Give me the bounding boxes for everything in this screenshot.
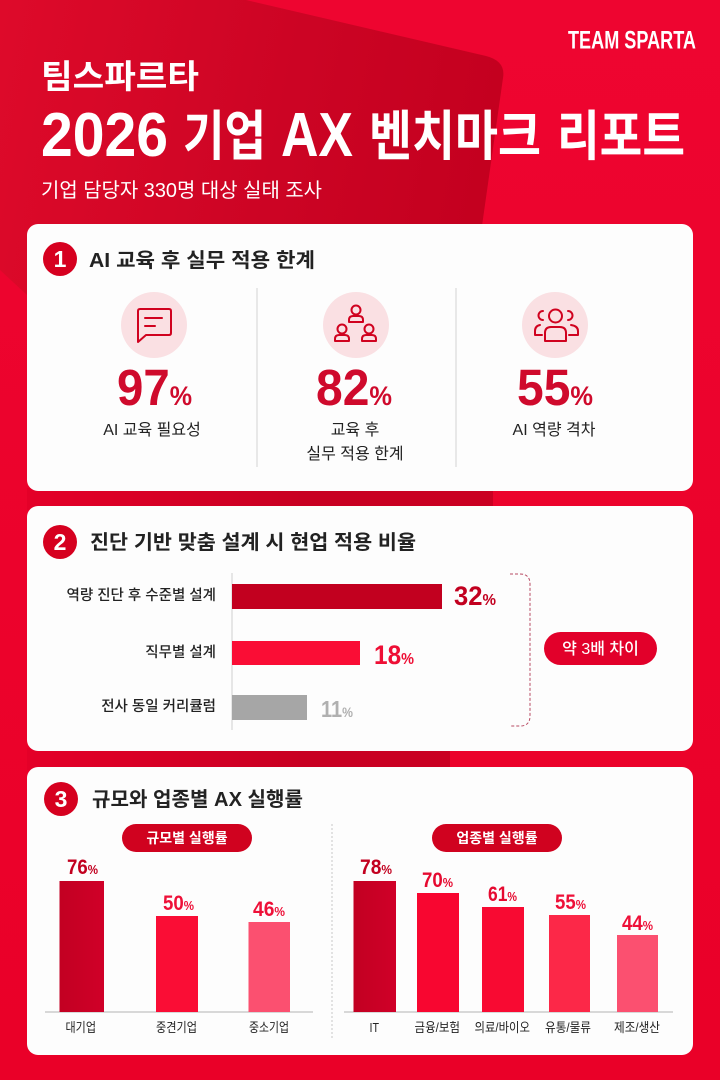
bar 중소기업 bbox=[248, 898, 290, 1035]
bar IT: IT bbox=[370, 1020, 379, 1035]
row 32%: 32% bbox=[454, 581, 496, 611]
bar 대기업: 대기업 bbox=[66, 1020, 96, 1035]
pill: 규모별 실행률 bbox=[122, 824, 252, 852]
main title: 리포트 bbox=[557, 107, 685, 167]
bar 대기업 bbox=[60, 856, 104, 1035]
row 11%: 11% bbox=[321, 696, 353, 722]
icon: speech bubble bbox=[121, 292, 187, 358]
icon: group bbox=[522, 292, 588, 358]
pill: 규모별 실행률: 규모별 실행률 bbox=[146, 830, 228, 846]
pill: 업종별 실행률: 업종별 실행률 bbox=[456, 830, 538, 846]
panel 1: AI 교육 후 실무 적용 한계 bbox=[27, 224, 693, 491]
row 11% bbox=[101, 695, 353, 722]
main title: 벤치마크 bbox=[369, 107, 541, 167]
label: AI 역량 격차 bbox=[513, 421, 596, 439]
bar 제조/생산 bbox=[614, 912, 660, 1035]
bar 중견기업 bbox=[156, 892, 198, 1035]
stat: 82%: 실무 적용 한계 bbox=[306, 445, 404, 463]
value 55%: 55% bbox=[517, 359, 593, 416]
number badge 2: 2 bbox=[54, 529, 66, 555]
company name: 팀스파르타 bbox=[41, 58, 199, 95]
panel 2: 진단 기반 맞춤 설계 bbox=[27, 506, 693, 751]
row 11%: 전사 동일 커리큘럼 bbox=[101, 698, 216, 715]
bracket bbox=[510, 574, 530, 726]
bar 제조/생산: 제조/생산 bbox=[614, 1020, 660, 1035]
row 18% bbox=[145, 640, 414, 670]
row 32% bbox=[66, 581, 496, 611]
number badge 2 bbox=[43, 525, 77, 559]
callout: 약 3배 차이 bbox=[544, 632, 657, 665]
bar 의료/바이오 bbox=[474, 883, 530, 1035]
value 97%: 97% bbox=[117, 359, 192, 416]
bar 중소기업: 중소기업 bbox=[249, 1020, 289, 1035]
row 18%: 18% bbox=[374, 640, 414, 670]
chart: by industry bbox=[344, 824, 673, 1035]
row 32%: 역량 진단 후 수준별 설계 bbox=[66, 587, 216, 604]
row 18%: 직무별 설계 bbox=[145, 644, 216, 661]
bar 대기업: 76% bbox=[67, 856, 98, 879]
main title: 2026 bbox=[41, 101, 168, 170]
bar 중견기업: 50% bbox=[163, 892, 194, 915]
bar 제조/생산: 44% bbox=[622, 912, 653, 935]
pill: 업종별 실행률 bbox=[432, 824, 562, 852]
subtitle: 기업 담당자 330명 대상 실태 조사 bbox=[41, 179, 322, 202]
bar 중소기업: 46% bbox=[253, 898, 285, 921]
number badge 3 bbox=[44, 782, 78, 816]
value 82%: 82% bbox=[316, 359, 392, 416]
header bbox=[41, 26, 696, 202]
heading 2: 진단 기반 맞춤 설계 시 현업 적용 비율 bbox=[90, 531, 416, 554]
stat: 82% bbox=[306, 292, 404, 463]
label: 교육 후 bbox=[331, 421, 379, 439]
label: AI 교육 필요성 bbox=[103, 421, 201, 439]
panel 3: 규모와 업종별 AX 실행률 bbox=[27, 767, 693, 1055]
stat: 97% bbox=[103, 292, 201, 439]
bar 금융/보험: 70% bbox=[422, 869, 453, 892]
bar 중견기업: 중견기업 bbox=[156, 1020, 197, 1035]
main title: AX bbox=[281, 101, 353, 170]
bar 의료/바이오: 61% bbox=[488, 883, 517, 906]
callout: 약 3배 차이: 약 3배 차이 bbox=[562, 640, 639, 658]
main title: 기업 bbox=[183, 107, 266, 167]
number badge 1 bbox=[43, 242, 77, 276]
chart: by company size bbox=[45, 824, 313, 1035]
bar 유통/물류: 55% bbox=[555, 891, 586, 914]
bar IT: 78% bbox=[360, 856, 392, 879]
number badge 3: 3 bbox=[55, 786, 67, 812]
icon: connected people bbox=[323, 292, 389, 358]
bar 금융/보험: 금융/보험 bbox=[414, 1020, 460, 1035]
bar 유통/물류: 유통/물류 bbox=[545, 1020, 591, 1035]
bar chart: design type bbox=[66, 581, 496, 722]
heading 1: AI 교육 후 실무 적용 한계 bbox=[89, 249, 315, 272]
stat: 55% bbox=[513, 292, 596, 439]
bar 의료/바이오: 의료/바이오 bbox=[474, 1020, 530, 1035]
bar 금융/보험 bbox=[414, 869, 460, 1035]
heading 3: 규모와 업종별 AX 실행률 bbox=[92, 788, 303, 811]
number badge 1: 1 bbox=[54, 246, 67, 272]
main title bbox=[41, 101, 685, 170]
bar 유통/물류 bbox=[545, 891, 591, 1035]
bar IT bbox=[354, 856, 396, 1035]
